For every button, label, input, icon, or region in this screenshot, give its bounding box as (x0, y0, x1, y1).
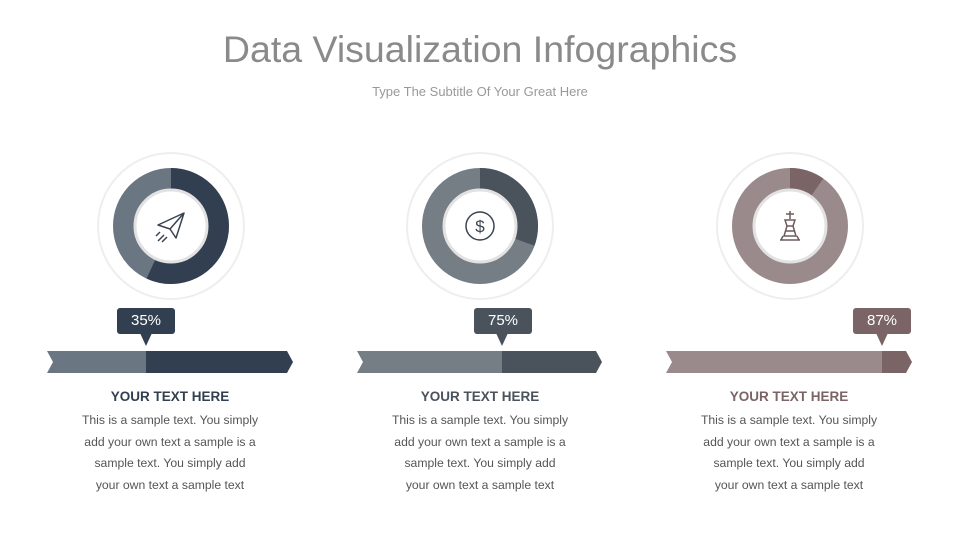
text block 3: YOUR TEXT HERE (730, 389, 848, 404)
text block 3: your own text a sample text (715, 478, 863, 492)
text block 3: add your own text a sample is a (703, 434, 875, 448)
text block 1: YOUR TEXT HERE (111, 389, 229, 404)
text block 1: add your own text a sample is a (84, 434, 256, 448)
panel 3 donut (717, 153, 863, 299)
bar 3 (666, 351, 912, 373)
text block 2: your own text a sample text (406, 478, 554, 492)
text block 3: This is a sample text. You simply (701, 413, 877, 427)
icon: dollar coin (466, 212, 494, 240)
text block 2 (392, 389, 568, 492)
tooltip 75% (474, 308, 532, 334)
text block 1: your own text a sample text (96, 478, 244, 492)
icon: dollar coin: $ (475, 217, 485, 236)
text block 3: sample text. You simply add (713, 456, 865, 470)
subtitle: Type The Subtitle Of Your Great Here (372, 84, 588, 99)
text block 1 (82, 389, 258, 492)
bar 1 (47, 351, 293, 373)
panel 1 donut (98, 153, 244, 299)
title: Data Visualization Infographics (223, 28, 737, 70)
text block 3 (701, 389, 877, 492)
text block 2: This is a sample text. You simply (392, 413, 568, 427)
tooltip 35%: 35% (131, 312, 161, 329)
text block 1: This is a sample text. You simply (82, 413, 258, 427)
tooltip 87% (853, 308, 911, 334)
icon: paper plane (156, 213, 184, 242)
icon: chess king (780, 211, 800, 240)
text block 1: sample text. You simply add (94, 456, 246, 470)
text block 2: YOUR TEXT HERE (421, 389, 539, 404)
panel 2 donut (407, 153, 553, 299)
tooltip 75%: 75% (488, 312, 518, 329)
text block 2: add your own text a sample is a (394, 434, 566, 448)
bar 2 (357, 351, 602, 373)
tooltip 87%: 87% (867, 312, 897, 329)
tooltip 35% (117, 308, 175, 334)
text block 2: sample text. You simply add (404, 456, 556, 470)
tooltip pointers (140, 333, 888, 346)
